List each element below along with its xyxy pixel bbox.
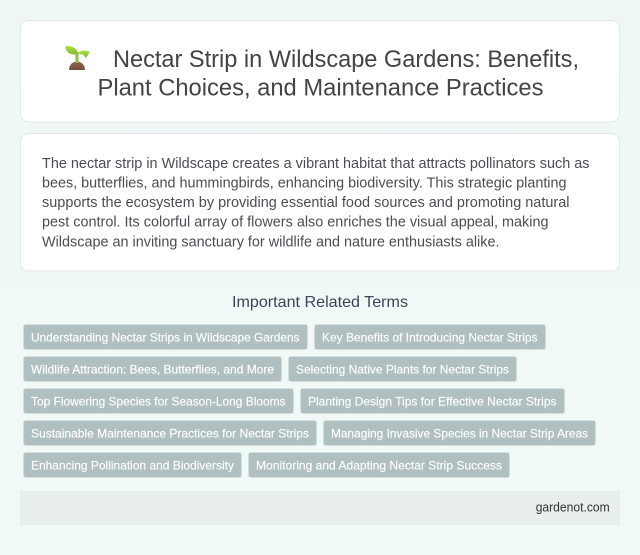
panel: term tags (24, 324, 596, 478)
tag (248, 452, 510, 478)
text block: description paragraph (42, 155, 590, 250)
tag: Managing Invasive Species in Nectar Strip Areas (331, 426, 588, 440)
panel: title card (20, 20, 620, 122)
tag: Planting Design Tips for Effective Nectar Strips (308, 394, 556, 408)
tag (300, 388, 564, 414)
tag: Selecting Native Plants for Nectar Strips (296, 362, 509, 376)
text block: description paragraph: supports the ecosystem by providing essential food sources and promoting natural (42, 194, 570, 211)
title: Plant Choices, and Maintenance Practices (98, 74, 544, 102)
text block: description paragraph: Wildscape an inviting sanctuary for wildlife and nature enthusiasts alike. (42, 234, 500, 250)
tag (24, 356, 282, 382)
tag: Understanding Nectar Strips in Wildscape Gardens (31, 330, 300, 344)
tag (24, 324, 308, 350)
tag: Key Benefits of Introducing Nectar Strips (322, 330, 538, 344)
text block: description paragraph: The nectar strip in Wildscape creates a vibrant habitat that attracts pollinators such as (42, 155, 590, 172)
tag (24, 388, 294, 414)
tag: Top Flowering Species for Season-Long Blooms (31, 394, 286, 408)
footer (20, 491, 620, 525)
heading: related terms: Important Related Terms (232, 294, 408, 311)
footer source text: gardenot.com (536, 501, 610, 515)
text block: description paragraph: bees, butterflies, and hummingbirds, enhancing biodiversity. This strategic planting (42, 174, 566, 192)
icon: seedling (65, 46, 90, 70)
tag: Wildlife Attraction: Bees, Butterflies, and More (31, 362, 274, 376)
title: Nectar Strip in Wildscape Gardens: Benefits, (113, 46, 579, 73)
tag (324, 420, 596, 446)
tag (24, 420, 316, 446)
panel: description (20, 134, 620, 271)
tag: Enhancing Pollination and Biodiversity (31, 458, 234, 472)
tag: Monitoring and Adapting Nectar Strip Success (256, 458, 502, 472)
tag (24, 452, 242, 478)
tag (288, 356, 516, 382)
tag (314, 324, 546, 350)
text block: description paragraph: pest control. Its colorful array of flowers also enriches the visual appeal, making (42, 214, 548, 230)
title (98, 46, 579, 102)
tag: Sustainable Maintenance Practices for Nectar Strips (31, 426, 309, 440)
